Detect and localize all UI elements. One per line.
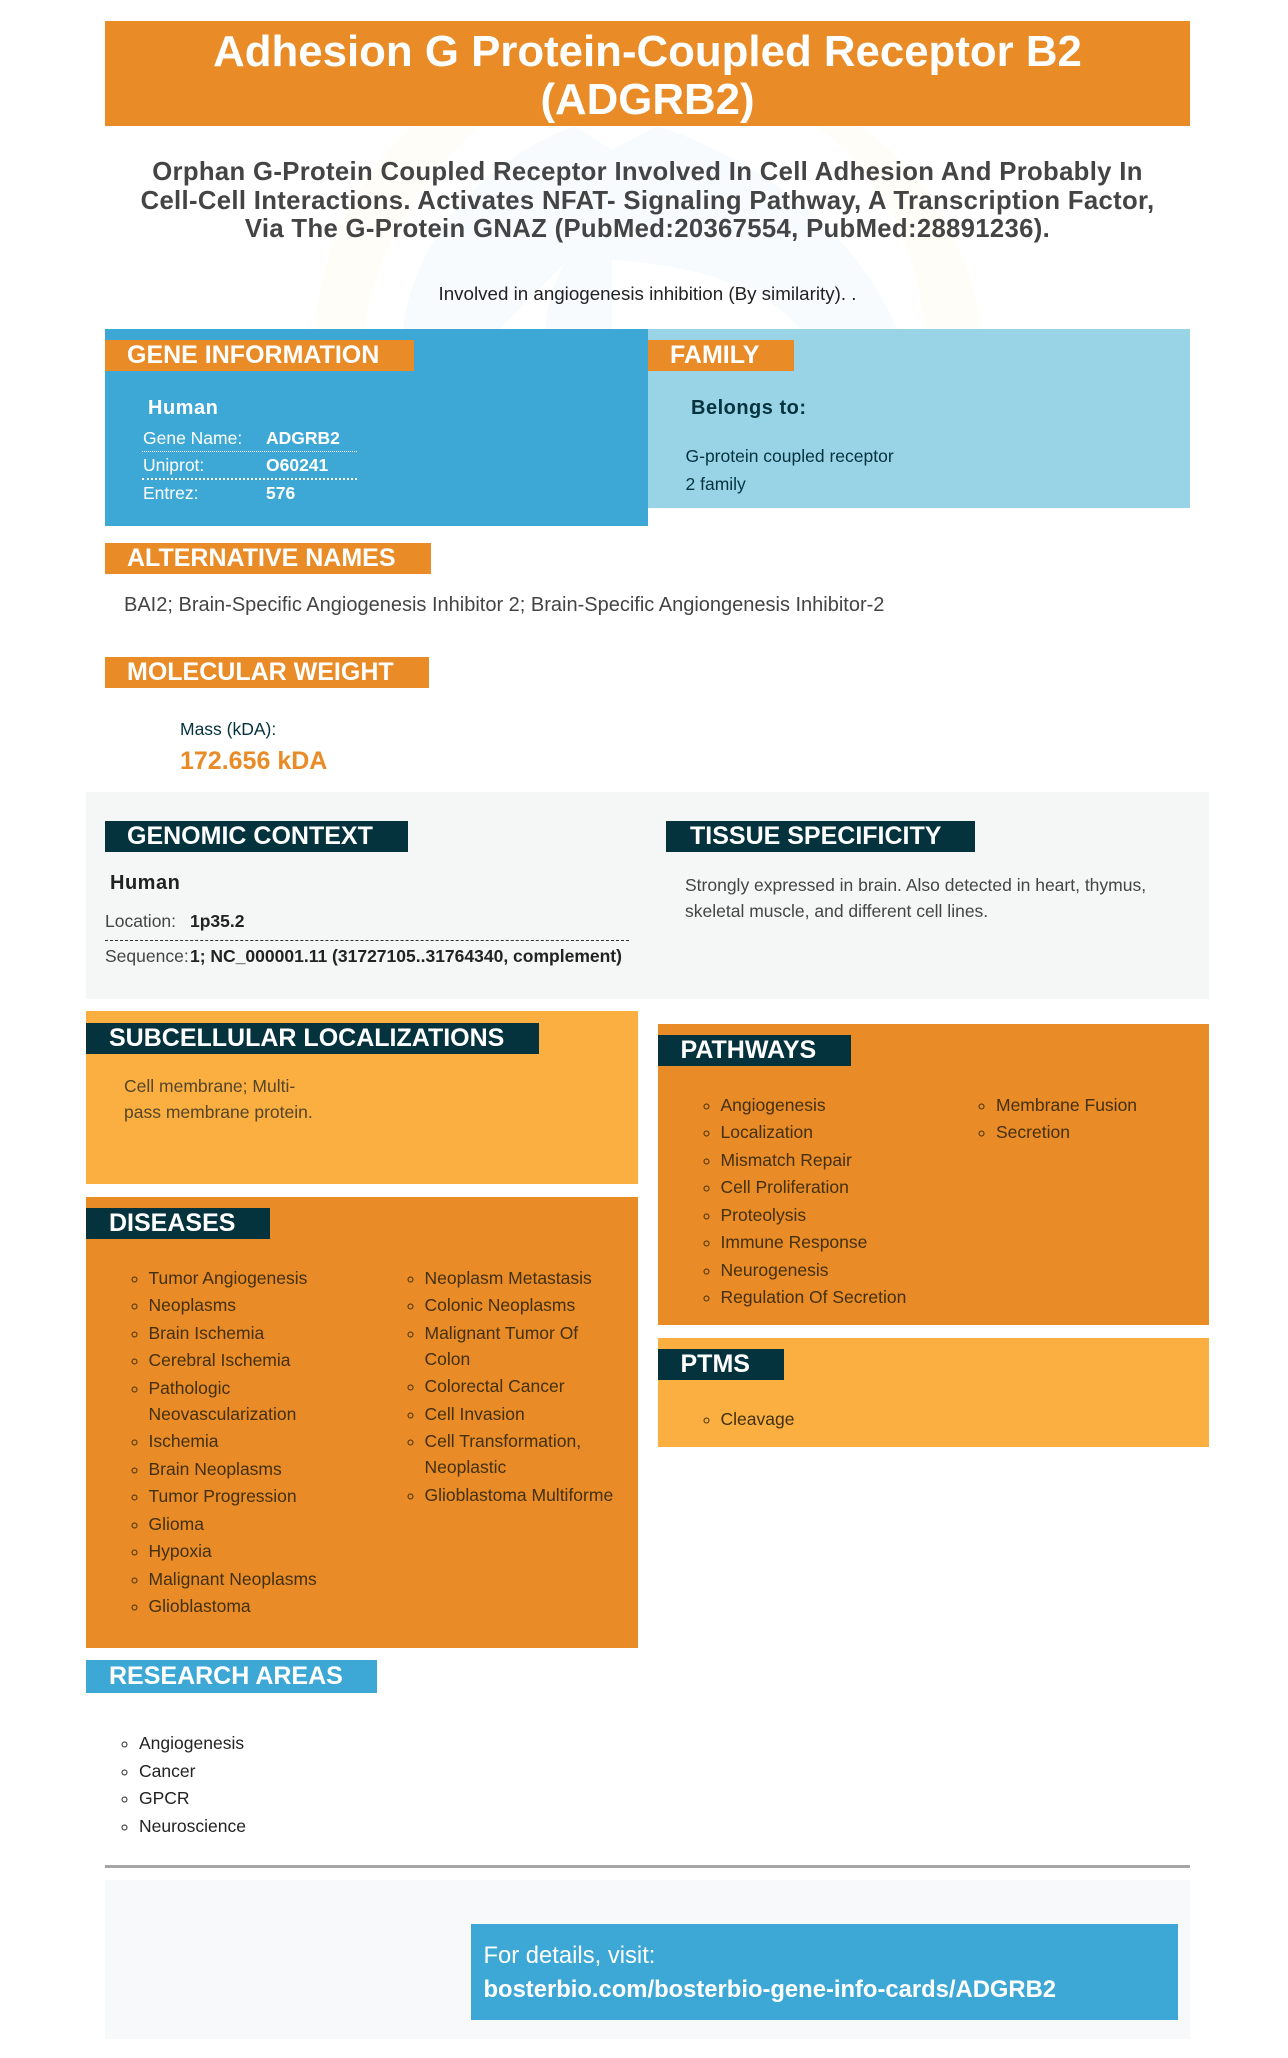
title [105, 21, 1190, 126]
title: (ADGRB2) [540, 75, 755, 124]
entrez row: 576 [266, 483, 295, 503]
pathways list column 1: Cell Proliferation [720, 1177, 849, 1197]
alternative names text: BAI2; Brain-Specific Angiogenesis Inhibitor 2; Brain-Specific Angiongenesis Inhibitor-2 [124, 594, 884, 616]
subtitle [141, 158, 1154, 243]
pathways list column 2 [978, 1095, 1137, 1142]
heading: diseases [86, 1208, 270, 1239]
panel: footer [105, 1880, 1190, 2039]
localization text: Cell membrane; Multi- [124, 1076, 295, 1096]
diseases list column 2: Colorectal Cancer [424, 1376, 565, 1396]
diseases list column 1: Tumor Angiogenesis [148, 1268, 307, 1288]
diseases list column 1: Hypoxia [148, 1541, 212, 1561]
localization text: pass membrane protein. [124, 1102, 313, 1122]
gene name row [143, 428, 340, 448]
diseases list column 2: Neoplasm Metastasis [424, 1268, 592, 1288]
subtitle: Via The G-Protein GNAZ (PubMed:20367554, PubMed:28891236). [245, 215, 1050, 243]
diseases list column 2: Colon [424, 1349, 470, 1369]
tissue specificity text [685, 875, 1146, 921]
diseases list column 1: Malignant Neoplasms [148, 1569, 317, 1589]
heading: research areas: RESEARCH AREAS [109, 1662, 343, 1690]
pathways list column 1: Localization [720, 1122, 813, 1142]
gene name row: Gene Name: [143, 428, 242, 448]
heading: gene information: GENE INFORMATION [127, 341, 379, 369]
callout: details link: For details, visit: [484, 1942, 655, 1969]
heading: molecular weight: MOLECULAR WEIGHT [127, 658, 394, 686]
subtitle: Cell-Cell Interactions. Activates NFAT- Signaling Pathway, A Transcription Factor, [141, 186, 1154, 214]
pathways list column 1 [704, 1095, 906, 1307]
sequence row: Sequence: [105, 946, 189, 966]
heading: genomic context: GENOMIC CONTEXT [127, 822, 373, 850]
gene name row: ADGRB2 [266, 428, 340, 448]
mass label: Mass (kDA): [180, 719, 276, 739]
panel: diseases [86, 1197, 638, 1648]
sequence row: 1; NC_000001.11 (31727105..31764340, complement) [190, 946, 622, 966]
heading: family: FAMILY [670, 341, 759, 369]
diseases list column 1: Neoplasms [148, 1295, 236, 1315]
pathways list column 1: Angiogenesis [720, 1095, 826, 1115]
diseases list column 2: Glioblastoma Multiforme [424, 1485, 613, 1505]
family text [686, 446, 894, 494]
description: Involved in angiogenesis inhibition (By similarity). . [439, 283, 856, 304]
heading: diseases: DISEASES [109, 1209, 235, 1237]
pathways list column 1: Mismatch Repair [720, 1150, 852, 1170]
pathways list column 1: Neurogenesis [720, 1260, 828, 1280]
diseases list column 1 [132, 1268, 317, 1616]
pathways list column 1: Immune Response [720, 1232, 867, 1252]
diseases list column 2: Cell Invasion [424, 1404, 525, 1424]
heading: subcellular localizations: SUBCELLULAR LOCALIZATIONS [109, 1024, 504, 1052]
ptms list: Cleavage [720, 1409, 794, 1429]
localization text [124, 1076, 313, 1122]
panel: pathways [658, 1024, 1209, 1325]
uniprot row: O60241 [266, 455, 328, 475]
callout: details link [471, 1924, 1178, 2020]
location row [105, 911, 244, 931]
research areas list: Angiogenesis [139, 1733, 244, 1753]
callout: details link: bosterbio.com/bosterbio-gene-info-cards/ADGRB2 [484, 1976, 1056, 2003]
background watermark logo [300, 126, 1000, 329]
uniprot row: Uniprot: [143, 455, 204, 475]
research areas list: Cancer [139, 1760, 195, 1780]
diseases list column 1: Pathologic [148, 1378, 230, 1398]
family text: 2 family [686, 474, 746, 494]
tissue specificity text: skeletal muscle, and different cell lines. [685, 901, 988, 921]
tissue specificity text: Strongly expressed in brain. Also detected in heart, thymus, [685, 875, 1146, 895]
diseases list column 1: Ischemia [148, 1431, 219, 1451]
entrez row [143, 483, 295, 503]
heading: pathways [658, 1035, 851, 1066]
heading: ptms: PTMS [680, 1350, 750, 1378]
heading: ptms [658, 1349, 784, 1380]
pathways list column 1: Proteolysis [720, 1205, 806, 1225]
mass value: 172.656 kDA [180, 747, 327, 775]
species label: Human [110, 872, 180, 894]
diseases list column 1: Brain Ischemia [148, 1323, 264, 1343]
diseases list column 2: Neoplastic [424, 1457, 506, 1477]
heading: pathways: PATHWAYS [680, 1036, 816, 1064]
entrez row: Entrez: [143, 483, 198, 503]
diseases list column 1: Neovascularization [148, 1404, 296, 1424]
diseases list column 1: Brain Neoplasms [148, 1459, 282, 1479]
pathways list column 2: Secretion [996, 1122, 1070, 1142]
panel: ptms [658, 1338, 1209, 1447]
diseases list column 2: Cell Transformation, [424, 1431, 581, 1451]
pathways list column 1: Regulation Of Secretion [720, 1287, 906, 1307]
family label: Belongs to: [691, 397, 806, 419]
research areas list [122, 1733, 246, 1836]
panel: genomic context and tissue specificity [86, 792, 1209, 999]
family text: G-protein coupled receptor [686, 446, 894, 466]
panel: subcellular localizations [86, 1011, 638, 1184]
pathways list column 2: Membrane Fusion [996, 1095, 1137, 1115]
location row: 1p35.2 [190, 911, 244, 931]
heading: research areas [86, 1660, 377, 1693]
diseases list column 1: Tumor Progression [148, 1486, 297, 1506]
title: Adhesion G Protein-Coupled Receptor B2 [213, 27, 1082, 76]
heading: family [648, 340, 794, 371]
subtitle: Orphan G-Protein Coupled Receptor Involved In Cell Adhesion And Probably In [152, 158, 1143, 186]
diseases list column 2 [408, 1268, 613, 1505]
species label: Human [148, 397, 218, 419]
diseases list column 2: Malignant Tumor Of [424, 1323, 578, 1343]
location row: Location: [105, 911, 176, 931]
panel: gene information [105, 329, 648, 526]
research areas list: GPCR [139, 1788, 190, 1808]
panel: family [648, 329, 1190, 508]
diseases list column 1: Glioblastoma [148, 1596, 251, 1616]
uniprot row [143, 455, 328, 475]
diseases list column 2: Colonic Neoplasms [424, 1295, 575, 1315]
diseases list column 1: Cerebral Ischemia [148, 1350, 290, 1370]
heading: alternative names: ALTERNATIVE NAMES [127, 544, 396, 572]
heading: tissue specificity: TISSUE SPECIFICITY [690, 822, 941, 850]
diseases list column 1: Glioma [148, 1514, 204, 1534]
research areas list: Neuroscience [139, 1816, 246, 1836]
